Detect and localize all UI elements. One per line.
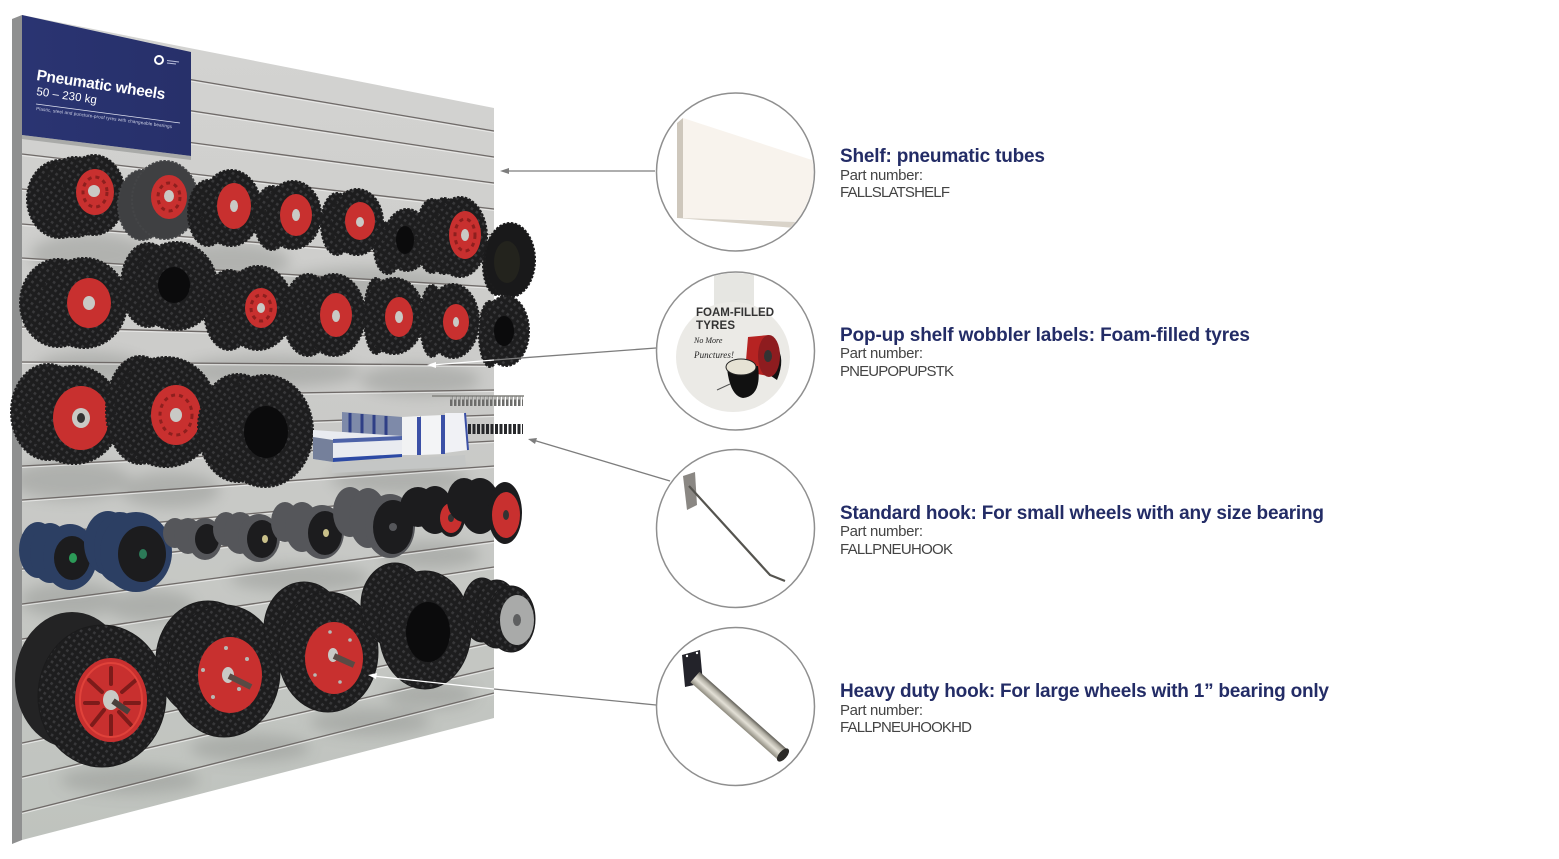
wheels: row 4 small xyxy=(19,478,522,592)
wobbler heading: FOAM-FILLED xyxy=(696,307,774,319)
text block: wobbler labels xyxy=(840,325,1250,380)
sign: Pneumatic wheels header xyxy=(22,15,191,160)
text block: standard hook: Part number: xyxy=(840,523,923,540)
text block: heavy duty hook: Heavy duty hook: For large wheels with 1” bearing only xyxy=(840,681,1329,702)
arrow: wobbler leader xyxy=(427,348,656,368)
wheels: row 2 xyxy=(20,242,529,367)
circle: standard hook product xyxy=(656,450,814,608)
arrow: shelf leader xyxy=(500,168,655,174)
text block: standard hook xyxy=(840,503,1324,558)
text block: heavy duty hook xyxy=(840,681,1329,736)
text block: standard hook: FALLPNEUHOOK xyxy=(840,541,953,558)
wobbler tagline line 2: Punctures! xyxy=(693,350,734,360)
text block: standard hook: Standard hook: For small wheels with any size bearing xyxy=(840,503,1324,524)
text block: heavy duty hook: Part number: xyxy=(840,702,923,719)
panel: slatwall display board xyxy=(10,15,494,844)
text block: shelf: Part number: xyxy=(840,167,923,184)
shelf of boxed bearings xyxy=(313,412,468,473)
arrow: heavy duty hook leader xyxy=(368,673,656,705)
wobbler tagline: No More xyxy=(693,336,723,345)
text block: wobbler labels: Pop-up shelf wobbler labels: Foam-filled tyres xyxy=(840,325,1250,346)
slat lines xyxy=(22,51,494,812)
sign subtitle: 50 – 230 kg xyxy=(36,86,98,107)
circle: heavy duty hook product xyxy=(656,628,814,786)
sign description: Plastic, steel and puncture-proof tyres with changeable bearings xyxy=(36,106,173,129)
text block: heavy duty hook: FALLPNEUHOOKHD xyxy=(840,719,972,736)
arrow: standard hook leader xyxy=(528,438,670,481)
text block: shelf: FALLSLATSHELF xyxy=(840,184,950,201)
wheels: row 3 xyxy=(11,356,313,487)
slat highlights xyxy=(22,52,494,814)
circle: wobbler label product xyxy=(656,270,814,430)
icon: brand logo ring xyxy=(155,56,179,64)
text block: wobbler labels: Part number: xyxy=(840,345,923,362)
sign title: Pneumatic wheels xyxy=(35,67,166,103)
wobbler tyre picture xyxy=(717,335,781,398)
circle: shelf product xyxy=(656,93,815,251)
wheels: row 5 large xyxy=(15,563,535,767)
wheels: row 1 xyxy=(27,155,535,297)
text block: shelf: Shelf: pneumatic tubes xyxy=(840,146,1045,167)
wobbler heading line 2: TYRES xyxy=(696,320,735,332)
text block: shelf xyxy=(840,146,1045,201)
text block: wobbler labels: PNEUPOPUPSTK xyxy=(840,363,954,380)
hooks with small bearings xyxy=(432,396,524,429)
